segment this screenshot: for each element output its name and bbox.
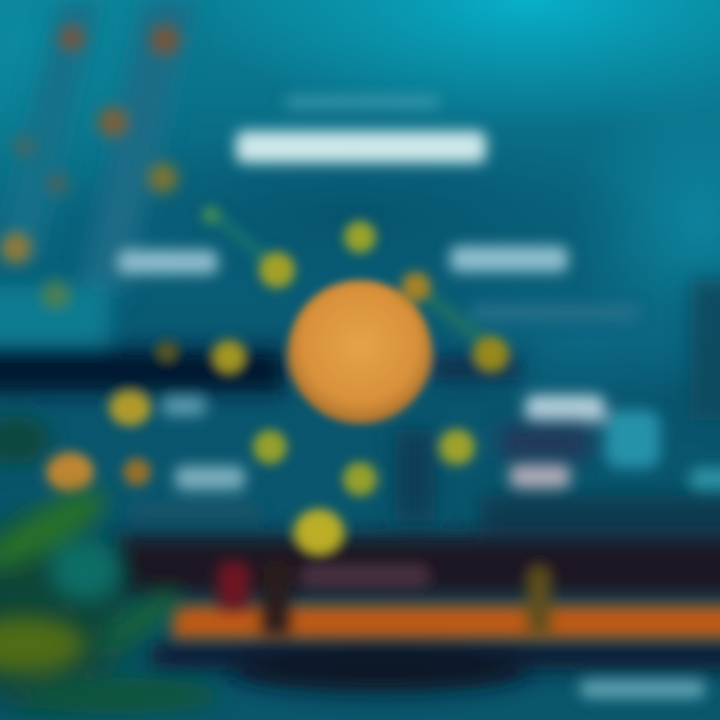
dark pillar: [262, 560, 290, 635]
plant leaves, bottom left: [0, 416, 220, 714]
red block: [218, 562, 250, 610]
title main line: [236, 131, 486, 163]
central coin: [288, 272, 432, 424]
title small line: [285, 97, 440, 107]
coin tab: [401, 272, 431, 302]
orange strip: [172, 606, 720, 638]
tower lights: [1, 25, 180, 309]
blurred title: [236, 97, 486, 163]
olive marker: [527, 565, 551, 635]
connector lines: [210, 212, 495, 350]
dark city blocks, lower right: [395, 280, 720, 535]
lower dark band: [150, 642, 720, 670]
diagonal towers, top left: [0, 0, 195, 345]
orange strip section: [115, 536, 720, 692]
dark horizontal band, left: [0, 350, 520, 392]
blurred labels: [118, 246, 720, 698]
pink label: [300, 564, 430, 588]
dark upper band: [115, 536, 720, 598]
yellow nodes: [46, 206, 509, 555]
